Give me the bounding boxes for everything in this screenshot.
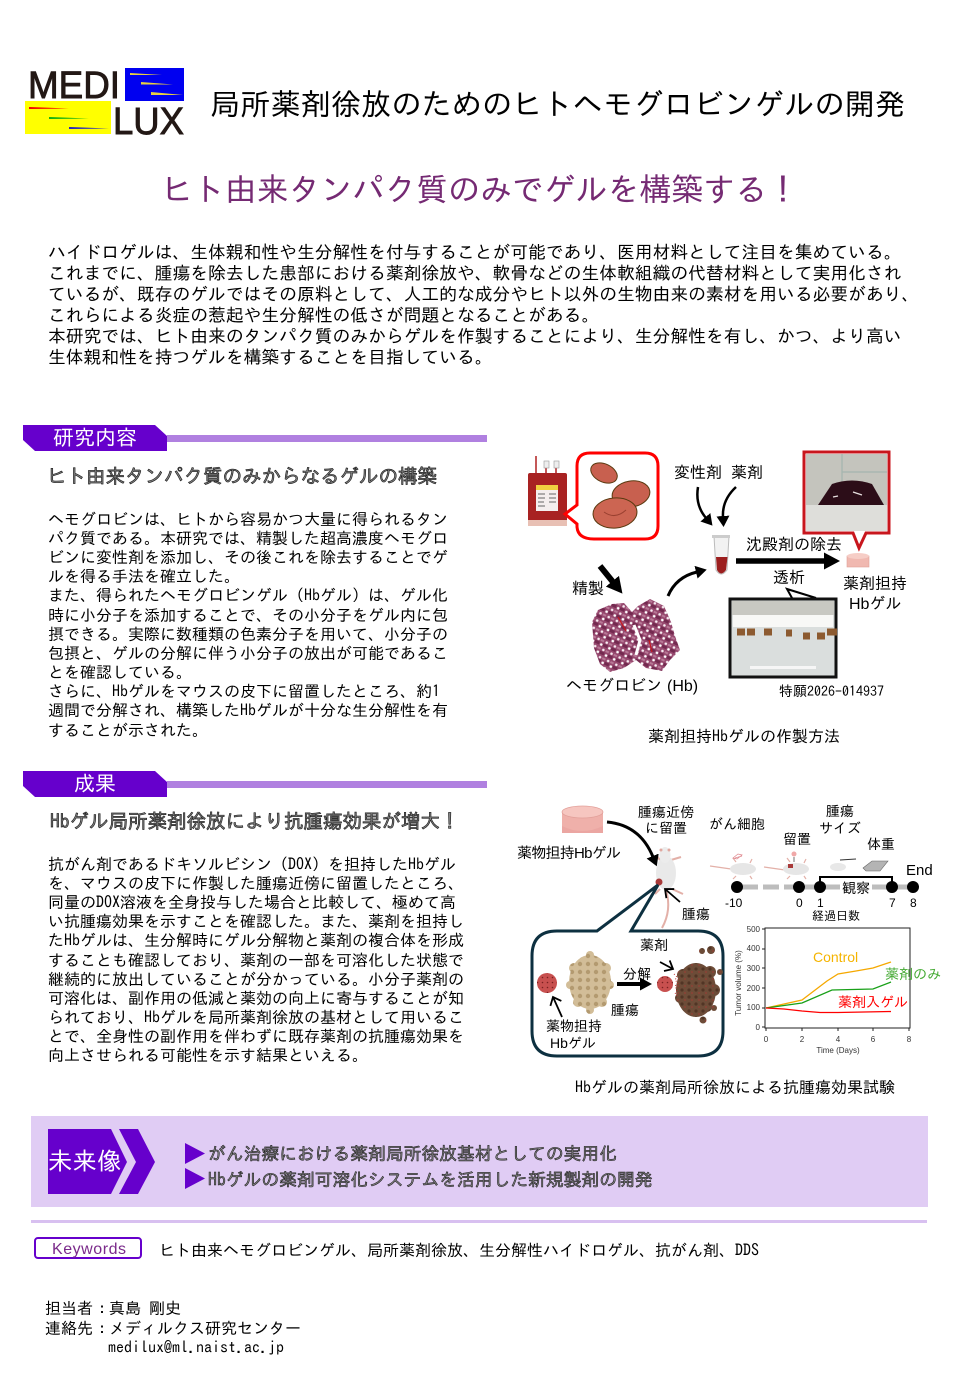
timeline: -10: [725, 896, 743, 910]
label: hemoglobin: (Hb): [667, 678, 698, 695]
results text block: 向上させられる可能性を示す結果といえる。: [48, 1047, 368, 1063]
label: drug-loaded Hb gel: [843, 575, 907, 613]
label: hemoglobin: ヘモグロビン: [566, 677, 662, 693]
label: tumor size: 腫瘍: [826, 804, 854, 818]
label: drug-loaded gel: Hbゲル: [550, 1035, 596, 1051]
research text block: [48, 511, 448, 738]
arrow: purification: [600, 566, 613, 582]
series: drug only: [766, 982, 891, 1008]
photo callout: gel: [804, 452, 889, 548]
label: placement near tumor: [638, 805, 694, 835]
line chart: tumor volume: 6: [871, 1035, 876, 1044]
label: drug-loaded Hb gel: Hbゲル: [849, 595, 901, 613]
logo: MEDILUX: MEDI: [28, 65, 120, 107]
research text block: さらに、Hbゲルをマウスの皮下に留置したところ、約1: [48, 683, 440, 699]
label: purification: 精製: [572, 580, 604, 596]
timeline: 8: [910, 896, 917, 910]
line chart: tumor volume: 500: [747, 925, 761, 934]
label: drug-loaded Hb gel: 薬物担持Hbゲル: [517, 845, 621, 862]
line chart: tumor volume: 400: [747, 944, 761, 953]
label: drug only: 薬剤のみ: [885, 967, 941, 981]
research text block: とを確認している。: [48, 664, 192, 680]
intro text block: [48, 244, 919, 366]
label: hemoglobin: [566, 677, 698, 695]
timeline: 観察: [842, 881, 870, 895]
line chart: tumor volume: 2: [800, 1035, 805, 1044]
label: tumor size: サイズ: [819, 821, 861, 835]
intro text block: ハイドロゲルは、生体親和性や生分解性を付与することが可能であり、医用材料として注目を集めている。: [48, 244, 902, 262]
research text block: ルを得る手法を確立した。: [48, 568, 240, 584]
label: reagents: 薬剤: [731, 464, 763, 480]
results text block: とで、全身性の副作用を伴わずに既存薬剤の抗腫瘍効果を: [48, 1028, 464, 1044]
figure: Hb gel preparation method: [528, 452, 907, 744]
arrow: tumor marker: [665, 889, 680, 902]
icon: drug-loaded gel: [562, 806, 603, 833]
timeline: 0: [796, 896, 803, 910]
label: placement: 留置: [783, 832, 811, 846]
heading: research content: ヒト由来タンパク質のみからなるゲルの構築: [47, 466, 437, 486]
intro text block: ているが、既存のゲルではその原料として、人工的な成分やヒト以外の生物由来の素材を用いる必要があり、: [48, 284, 919, 304]
contact information: medilux@ml.naist.ac.jp: [108, 1339, 284, 1355]
label: reagents: [674, 464, 763, 480]
label: tumor: 腫瘍: [611, 1003, 639, 1017]
figure caption: Hbゲルの薬剤局所徐放による抗腫瘍効果試験: [575, 1079, 895, 1095]
icon: hemoglobin molecule: [592, 599, 680, 672]
arrows: reagents into tube: [697, 487, 736, 518]
label: body weight: 体重: [867, 836, 895, 851]
arrow: drug: [660, 962, 673, 969]
research text block: することが示された。: [48, 722, 208, 738]
series: drug gel: [766, 1008, 891, 1012]
line chart: tumor volume: 8: [907, 1035, 912, 1044]
keywords badge: Keywords: [52, 1241, 126, 1258]
research text block: 時に小分子を添加することで、その小分子をゲル内に包: [48, 607, 448, 623]
title: 局所薬剤徐放のためのヒトヘモグロビンゲルの開発: [210, 89, 905, 119]
research text block: 摂できる。実際に数種類の色素分子を用いて、小分子の: [48, 626, 448, 642]
results text block: 可溶化は、副作用の低減と薬効の向上に寄与することが知: [48, 990, 464, 1006]
results text block: 継続的に放出していることが分かっている。小分子薬剤の: [48, 971, 464, 987]
line chart: tumor volume: Time (Days): [816, 1046, 860, 1055]
intro text block: 本研究では、ヒト由来のタンパク質のみからゲルを作製することにより、生分解性を有し、かつ、より高い: [48, 328, 902, 346]
figure caption: 薬剤担持Hbゲルの作製方法: [648, 728, 840, 744]
line chart: tumor volume: 100: [747, 1003, 761, 1012]
keywords badge: [35, 1238, 141, 1258]
series: control: [766, 962, 891, 1008]
label: cancer cells: がん細胞: [709, 817, 765, 831]
heading: results: Hbゲル局所薬剤徐放により抗腫瘍効果が増大！: [50, 811, 460, 831]
intro text block: これらによる炎症の惹起や生分解性の低さが問題となることがある。: [48, 306, 599, 324]
label: placement near tumor: に留置: [645, 821, 687, 835]
research text block: 週間で分解され、構築したHbゲルが十分な生分解性を有: [48, 701, 448, 718]
label: tumor: 腫瘍: [682, 907, 710, 921]
arrow: precipitant removal: [736, 558, 825, 564]
label: placement near tumor: 腫瘍近傍: [638, 805, 694, 819]
panel: future vision: [31, 1116, 928, 1207]
results text block: 抗がん剤であるドキソルビシン（DOX）を担持したHbゲル: [48, 856, 456, 872]
line chart: tumor volume: 300: [747, 964, 761, 973]
research text block: 包摂と、ゲルの分解に伴う小分子の放出が可能であるこ: [48, 645, 448, 661]
results text block: い抗腫瘍効果を示すことを確認した。また、薬剤を担持し: [48, 913, 464, 929]
intro text block: 生体親和性を持つゲルを構築することを目指している。: [48, 348, 493, 366]
research text block: ビンに変性剤を添加し、その後これを除去することでゲ: [48, 549, 448, 565]
line chart: tumor volume: 0: [764, 1035, 769, 1044]
label: degradation: 分解: [623, 967, 651, 981]
icon: chevron arrow: [48, 1129, 155, 1194]
section header: 成果: 成果: [74, 773, 116, 794]
intro text block: これまでに、腫瘍を除去した患部における薬剤徐放や、軟骨などの生体軟組織の代替材料として実用化され: [48, 264, 902, 282]
label: drug-loaded Hb gel: 薬剤担持: [843, 575, 907, 591]
section header: 研究内容: [23, 425, 487, 451]
research text block: ヘモグロビンは、ヒトから容易かつ大量に得られるタン: [48, 511, 448, 527]
subtitle: ヒト由来タンパク質のみでゲルを構築する！: [161, 173, 799, 205]
callout: red blood cells: [565, 453, 658, 539]
contact information: [45, 1300, 301, 1355]
line chart: tumor volume: 4: [836, 1035, 841, 1044]
arrow: gel to mouse: [607, 822, 653, 857]
contact information: 真島: [109, 1300, 141, 1316]
results text block: られており、Hbゲルを局所薬剤徐放の基材として用いるこ: [48, 1009, 464, 1025]
contact information: 連絡先: [45, 1320, 93, 1336]
line chart: tumor volume: 0: [756, 1023, 761, 1032]
icon: degrading gel and tumor: [657, 946, 723, 1024]
icon: gel sphere: [537, 973, 557, 993]
timeline: [725, 877, 919, 922]
timeline: 1: [817, 896, 824, 910]
icon: blood bag: [528, 456, 567, 526]
label: End: End: [906, 862, 933, 879]
line chart: tumor volume: 200: [747, 984, 761, 993]
label: dialysis: 透析: [773, 569, 805, 585]
label: patent number: 特願2026-014937: [779, 684, 884, 698]
bullet 1: がん治療における薬剤局所徐放基材としての実用化: [208, 1145, 617, 1163]
results text block: することも確認しており、薬剤の一部を可溶化した状態で: [48, 952, 464, 968]
section header: 研究内容: 研究内容: [53, 427, 137, 448]
research text block: また、得られたヘモグロビンゲル（Hbゲル）は、ゲル化: [48, 587, 448, 603]
icon: tumor cells: [566, 951, 614, 1014]
photo: dialysis beaker: [730, 589, 837, 677]
label: drug-loaded gel: 薬物担持: [546, 1018, 602, 1033]
logo: MEDILUX: [25, 65, 184, 143]
contact information: 剛史: [149, 1300, 181, 1316]
results text block: 同量のDOX溶液を全身投与した場合と比較して、極めて高: [48, 894, 456, 910]
label: tumor size: [819, 804, 861, 835]
icon: test tube: [712, 535, 730, 574]
figure: anti-tumor effect test: [517, 804, 941, 1095]
label: drug-loaded gel: [546, 1018, 602, 1051]
line chart: tumor volume: [734, 925, 941, 1055]
icons: timeline mice: [710, 852, 888, 879]
contact information: 担当者: [45, 1300, 93, 1316]
contact information: :: [98, 1320, 106, 1336]
label: future vision: 未来像: [48, 1148, 122, 1173]
logo: MEDILUX: LUX: [113, 101, 184, 143]
bullet 2: Hbゲルの薬剤可溶化システムを活用した新規製剤の開発: [208, 1171, 653, 1189]
arrow: degradation: [617, 982, 641, 986]
icon: mouse: [655, 847, 683, 928]
results text block: たHbゲルは、生分解時にゲル分解物と薬剤の複合体を形成: [48, 932, 464, 948]
keywords text: ヒト由来ヘモグロビンゲル、局所薬剤徐放、生分解性ハイドロゲル、抗がん剤、DDS: [159, 1242, 759, 1258]
section header: 成果: [23, 771, 487, 797]
arrow: Hb to tube: [668, 572, 697, 596]
label: control: Control: [813, 949, 858, 965]
label: drug: 薬剤: [640, 938, 668, 952]
icon: pink gel: [847, 553, 869, 567]
contact information: :: [98, 1300, 106, 1316]
research text block: パク質である。本研究では、精製した超高濃度ヘモグロ: [48, 530, 448, 546]
label: drug gel: 薬剤入ゲル: [838, 995, 908, 1009]
line chart: tumor volume: Tumor volume (%): [734, 950, 743, 1016]
timeline: 経過日数: [812, 910, 860, 922]
results text block: [48, 856, 464, 1063]
label: precipitant removal: 沈殿剤の除去: [746, 536, 842, 552]
contact information: メディルクス研究センター: [109, 1320, 301, 1336]
timeline: 7: [889, 896, 896, 910]
results text block: を、マウスの皮下に作製した腫瘍近傍に留置したところ、: [48, 875, 464, 891]
label: reagents: 変性剤: [674, 464, 722, 480]
arrow: to gel sphere: [553, 997, 562, 1017]
callout: gel degradation: [532, 885, 723, 1056]
